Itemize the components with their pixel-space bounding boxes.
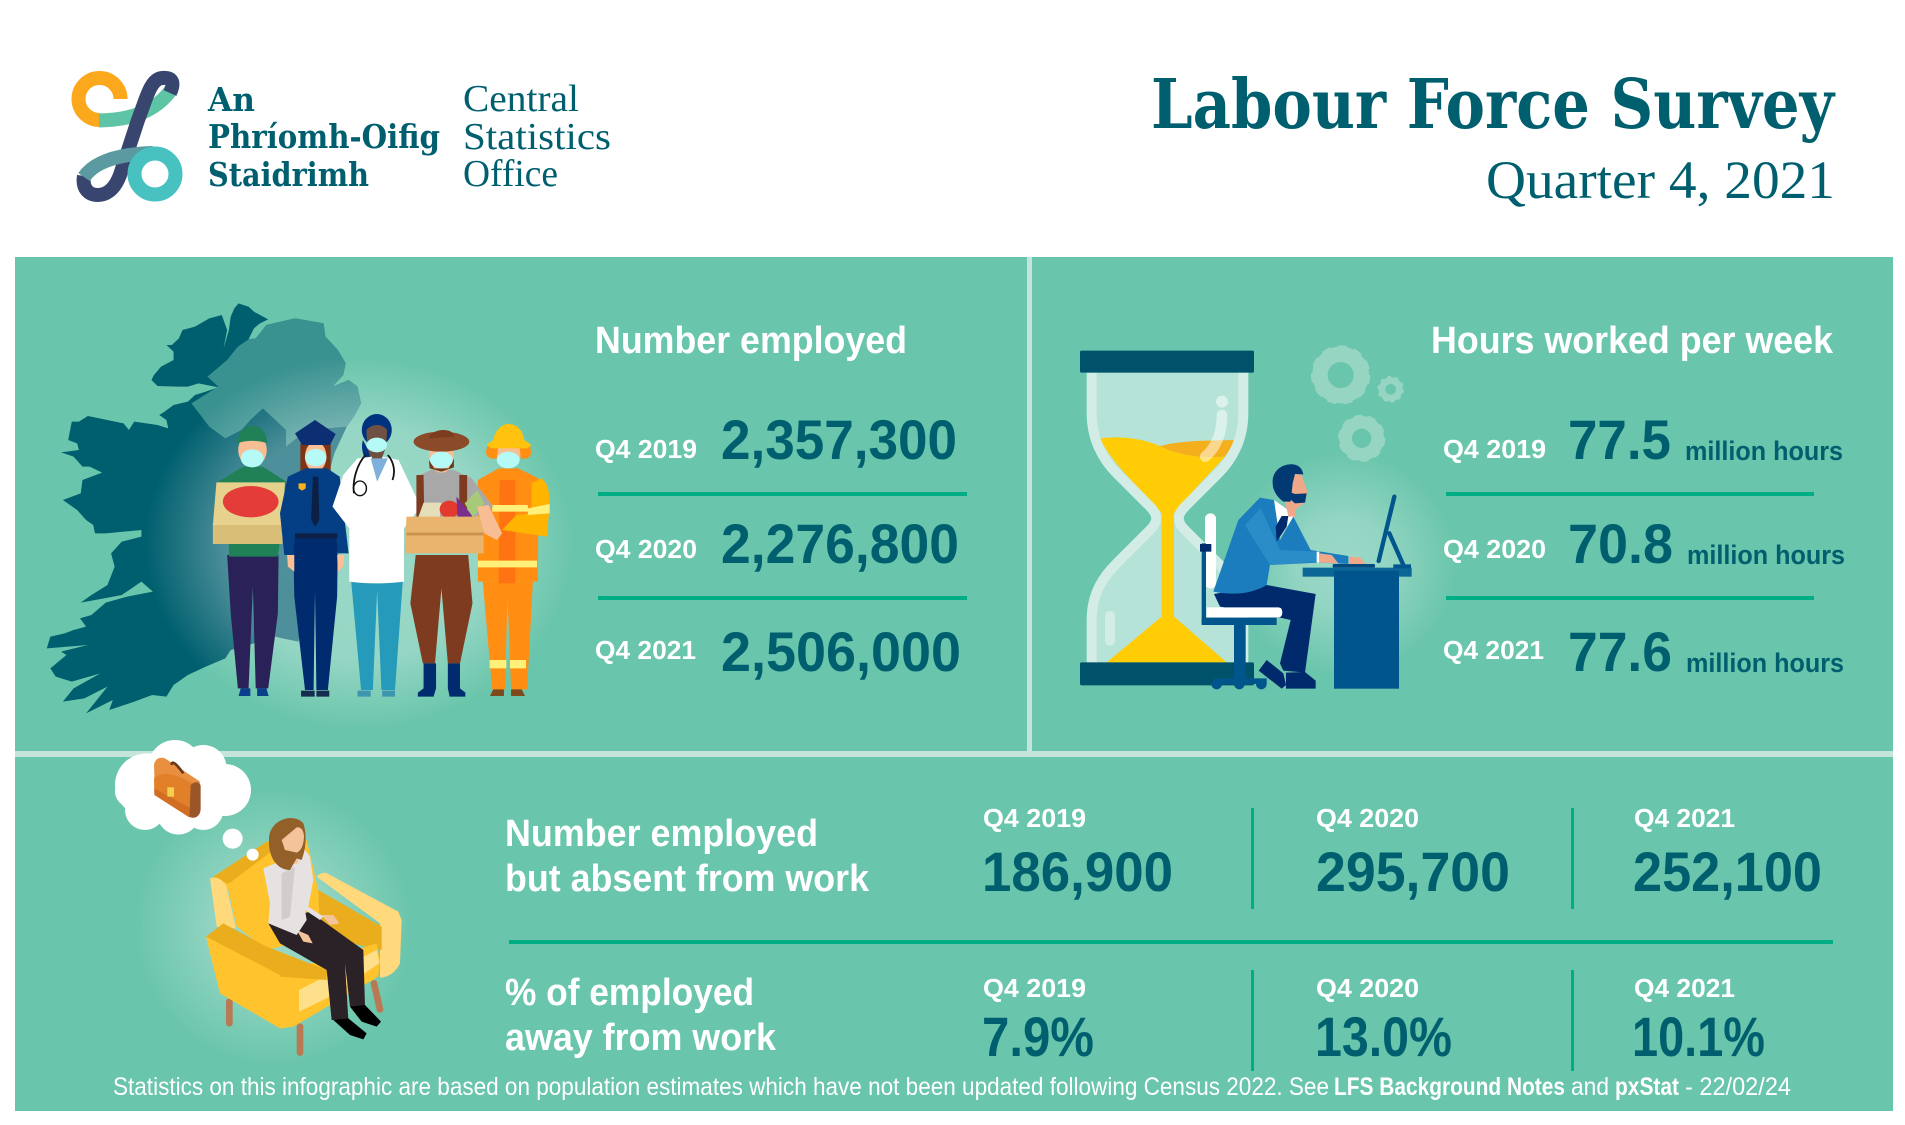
icon: hourglass (1080, 351, 1254, 685)
row: Q4 2021 hours: Q4 2021 (1443, 635, 1544, 665)
worker: doctor (332, 414, 421, 697)
logo Irish name: Staidrimh (208, 155, 369, 194)
logo: CSO (78, 78, 611, 195)
illustration: Ireland map and workers (47, 303, 574, 730)
woman seated (263, 818, 381, 1039)
logo Irish name: An (207, 80, 255, 119)
stat: away Q4 2021 (1632, 973, 1765, 1068)
stat: away Q4 2021: 10.1% (1632, 1005, 1765, 1068)
heading: hours worked per week: Hours worked per week (1431, 320, 1834, 362)
row: Q4 2019 employed: Q4 2019 (595, 434, 697, 464)
stat: absent Q4 2021: Q4 2021 (1634, 803, 1735, 833)
row: Q4 2020 hours: Q4 2020 (1443, 534, 1546, 564)
logo Irish name (207, 80, 440, 194)
row: Q4 2021 hours (1443, 620, 1844, 683)
row: Q4 2019 hours: 77.5 (1568, 408, 1671, 471)
logo English name: Central (463, 78, 579, 120)
worker: police officer (280, 420, 349, 697)
footnote: - 22/02/24 (1685, 1073, 1791, 1101)
illustration: woman in armchair thinking of work (115, 740, 413, 1067)
stat: away Q4 2020: 13.0% (1315, 1005, 1452, 1068)
row: Q4 2020 hours: million hours (1687, 540, 1845, 570)
stat: away Q4 2019: Q4 2019 (983, 973, 1086, 1003)
icon: armchair (206, 840, 402, 1053)
row: Q4 2019 employed (595, 408, 957, 471)
logo Irish name: Phríomh-Oifig (208, 117, 440, 156)
worker: firefighter (478, 424, 550, 696)
stat: absent Q4 2020: 295,700 (1316, 840, 1510, 903)
heading: percent of employed away from work: % of employed (505, 972, 754, 1014)
logo English name: Office (463, 153, 558, 195)
logo English name: Statistics (463, 116, 611, 158)
row: Q4 2020 employed (595, 512, 959, 575)
heading: number employed but absent from work: Number employed (505, 813, 818, 855)
heading: percent of employed away from work: away from work (505, 1017, 777, 1059)
stat: away Q4 2021: Q4 2021 (1634, 973, 1735, 1003)
row: Q4 2021 employed: 2,506,000 (721, 620, 961, 683)
stat: away Q4 2020 (1315, 973, 1452, 1068)
stat: away Q4 2019 (982, 973, 1094, 1068)
heading: number employed: Number employed (595, 320, 907, 362)
stat: absent Q4 2019: 186,900 (982, 840, 1173, 903)
icon: thought bubble with briefcase (115, 740, 259, 861)
worker: delivery person (213, 426, 286, 696)
row: Q4 2021 hours: million hours (1686, 648, 1844, 678)
footnote: Statistics on this infographic are based on population estimates which have not been updated following Census 2022. See (113, 1073, 1329, 1101)
subtitle: Quarter 4, 2021 (1486, 150, 1835, 210)
logo mark (78, 78, 176, 195)
illustration: hourglass and office worker (1080, 348, 1457, 689)
panel: hours worked per week (1032, 257, 1893, 751)
footnote: pxStat (1615, 1073, 1680, 1101)
heading: percent of employed away from work (505, 972, 777, 1059)
heading: number employed but absent from work (505, 813, 870, 900)
office worker at desk (1200, 464, 1412, 689)
stat: absent Q4 2020 (1316, 803, 1510, 903)
row: Q4 2019 hours (1443, 408, 1843, 471)
panel: absent from work (15, 740, 1893, 1111)
footnote: LFS Background Notes (1334, 1073, 1565, 1101)
panel: number employed (15, 257, 1027, 751)
stat: absent Q4 2020: Q4 2020 (1316, 803, 1419, 833)
stat: absent Q4 2021: 252,100 (1633, 840, 1822, 903)
logo English name (463, 78, 611, 195)
map of Ireland (47, 303, 361, 713)
icon: gears (1314, 348, 1402, 460)
row: Q4 2019 hours: million hours (1685, 436, 1843, 466)
stat: away Q4 2020: Q4 2020 (1316, 973, 1419, 1003)
stat: away Q4 2019: 7.9% (982, 1005, 1094, 1068)
row: Q4 2021 employed (595, 620, 961, 683)
footnote: and (1571, 1073, 1609, 1101)
row: Q4 2021 employed: Q4 2021 (595, 635, 696, 665)
row: Q4 2021 hours: 77.6 (1568, 620, 1672, 683)
worker: farmer (405, 430, 502, 697)
stat: absent Q4 2021 (1633, 803, 1822, 903)
stat: absent Q4 2019 (982, 803, 1173, 903)
row: Q4 2020 employed: Q4 2020 (595, 534, 697, 564)
heading: number employed but absent from work: but absent from work (505, 858, 870, 900)
row: Q4 2020 hours: 70.8 (1568, 512, 1673, 575)
stat: absent Q4 2019: Q4 2019 (983, 803, 1086, 833)
row: Q4 2020 hours (1443, 512, 1845, 575)
row: Q4 2019 hours: Q4 2019 (1443, 434, 1546, 464)
row: Q4 2020 employed: 2,276,800 (721, 512, 959, 575)
row: Q4 2019 employed: 2,357,300 (721, 408, 957, 471)
